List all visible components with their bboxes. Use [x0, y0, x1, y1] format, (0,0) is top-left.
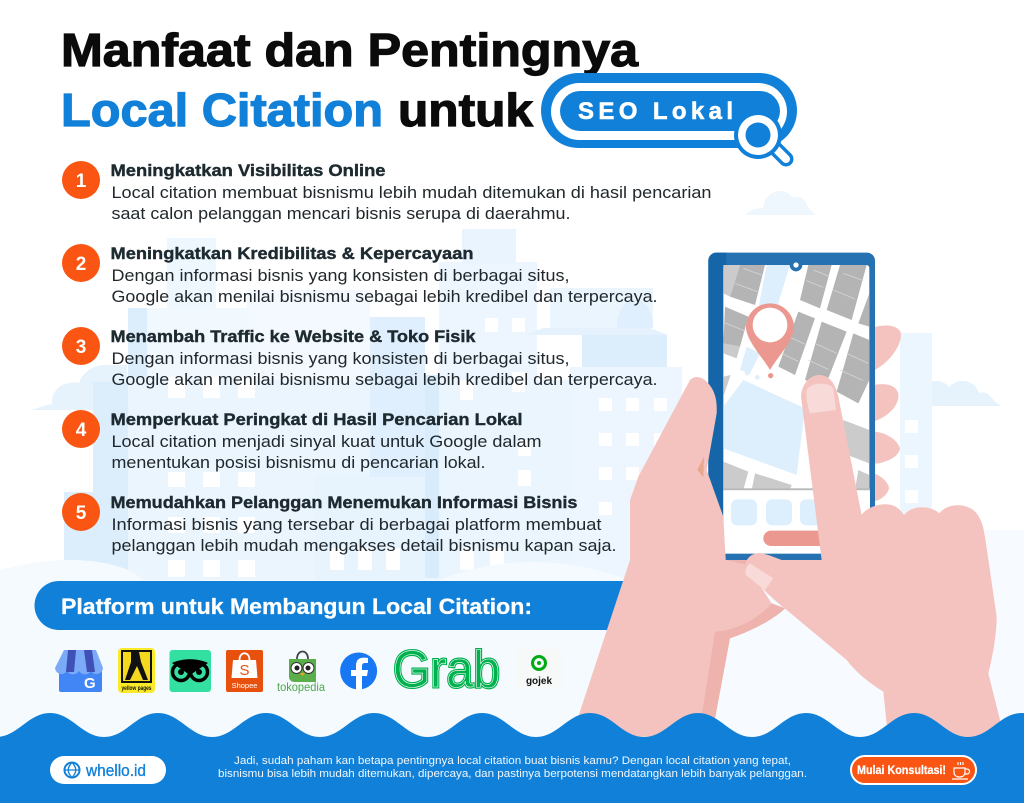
list item 5: Memudahkan Pelanggan Menemukan Informasi Bisnis: [110, 493, 578, 512]
phone screen map: [723, 259, 870, 554]
logo: Grab: Grab: [393, 641, 500, 699]
logo: Facebook: [340, 652, 377, 690]
title: Manfaat dan Pentingnya: [61, 24, 638, 76]
list item 5: pelanggan lebih mudah mengakses detail bisnismu kapan saja.: [112, 536, 616, 555]
list item 2: Dengan informasi bisnis yang konsisten di berbagai situs,: [112, 266, 570, 285]
list item 1: Local citation membuat bisnismu lebih mudah ditemukan di hasil pencarian: [112, 183, 712, 202]
list item 4: 4: [76, 420, 87, 441]
icon: magnifier: [734, 111, 786, 159]
list item 1: Meningkatkan Visibilitas Online: [110, 161, 386, 180]
list item 2: [62, 244, 658, 306]
logo: Shopee: [226, 650, 263, 692]
logo: Gojek: [516, 649, 562, 688]
closing text: [218, 755, 807, 780]
platform heading bar: [34, 581, 660, 630]
list item 5: [62, 493, 616, 555]
logo: Tripadvisor: [170, 650, 211, 692]
logo: Gojek: gojek: [526, 676, 552, 687]
list item 3: Menambah Traffic ke Website & Toko Fisik: [110, 327, 476, 346]
list item 1: 1: [76, 171, 87, 192]
footer wave band: [0, 713, 1024, 803]
list item 3: Google akan menilai bisnismu sebagai lebih kredibel dan terpercaya.: [112, 370, 658, 389]
list item 4: Local citation menjadi sinyal kuat untuk Google dalam: [112, 432, 542, 451]
closing text: Jadi, sudah paham kan betapa pentingnya local citation buat bisnis kamu? Dengan local citation yang tepat,: [234, 755, 791, 767]
closing text: bisnismu bisa lebih mudah ditemukan, dipercaya, dan pastinya berpotensi mendatangkan lebih banyak pelanggan.: [218, 768, 807, 780]
consult button: Mulai Konsultasi!: [857, 763, 946, 777]
platform logos: [55, 641, 562, 699]
list item 4: [62, 410, 542, 472]
illustration: hands holding phone: [572, 253, 1005, 740]
cloud top right: [745, 191, 816, 215]
badge: SEO Lokal search bar: [541, 73, 797, 159]
logo: Shopee: Shopee: [232, 681, 257, 690]
consult button: [851, 756, 976, 784]
title: [61, 24, 638, 136]
website pill: whello.id: [85, 761, 146, 780]
list item 4: menentukan posisi bisnismu di pencarian lokal.: [112, 453, 486, 472]
logo: yellow pages: [118, 648, 155, 693]
list item 2: 2: [76, 254, 86, 275]
platform heading bar: Platform untuk Membangun Local Citation:: [61, 594, 532, 619]
list item 2: Google akan menilai bisnismu sebagai lebih kredibel dan terpercaya.: [112, 287, 658, 306]
left hand: [572, 377, 785, 737]
list item 1: [62, 161, 712, 223]
background cityscape: [0, 191, 1024, 803]
fingernails: [806, 384, 836, 413]
list item 3: [62, 327, 658, 389]
logo: Tokopedia: tokopedia: [277, 680, 325, 694]
icon: coffee cup: [952, 762, 970, 779]
list item 3: 3: [76, 337, 86, 358]
logo: Shopee: S: [239, 662, 250, 679]
title: Local Citation: [61, 84, 383, 136]
cloud left: [32, 365, 127, 410]
list item 5: 5: [76, 503, 87, 524]
right hand pointing: [745, 375, 1005, 740]
icon: location pin: [745, 303, 794, 380]
list item 5: Informasi bisnis yang tersebar di berbagai platform membuat: [112, 515, 602, 534]
list item 4: Memperkuat Peringkat di Hasil Pencarian Lokal: [110, 410, 522, 429]
logo: Google My Business: G: [84, 675, 96, 692]
logo: Tokopedia: [277, 652, 325, 694]
badge: SEO Lokal search bar: SEO Lokal: [578, 98, 733, 125]
phone: [708, 253, 875, 567]
list item 3: Dengan informasi bisnis yang konsisten di berbagai situs,: [112, 349, 570, 368]
logo: Google My Business: [55, 650, 103, 692]
list item 2: Meningkatkan Kredibilitas & Kepercayaan: [110, 244, 473, 263]
cloud right: [900, 381, 1002, 406]
fingers behind phone: [873, 326, 901, 502]
website pill: [50, 756, 166, 784]
building windows: [168, 318, 918, 577]
logo: yellow pages: yellow pages: [122, 686, 152, 692]
logo: Grab: Grab: [393, 641, 500, 699]
title: untuk: [398, 84, 533, 136]
pale foreground hills: [0, 560, 1024, 803]
list item 1: saat calon pelanggan mencari bisnis serupa di daerahmu.: [112, 204, 570, 223]
